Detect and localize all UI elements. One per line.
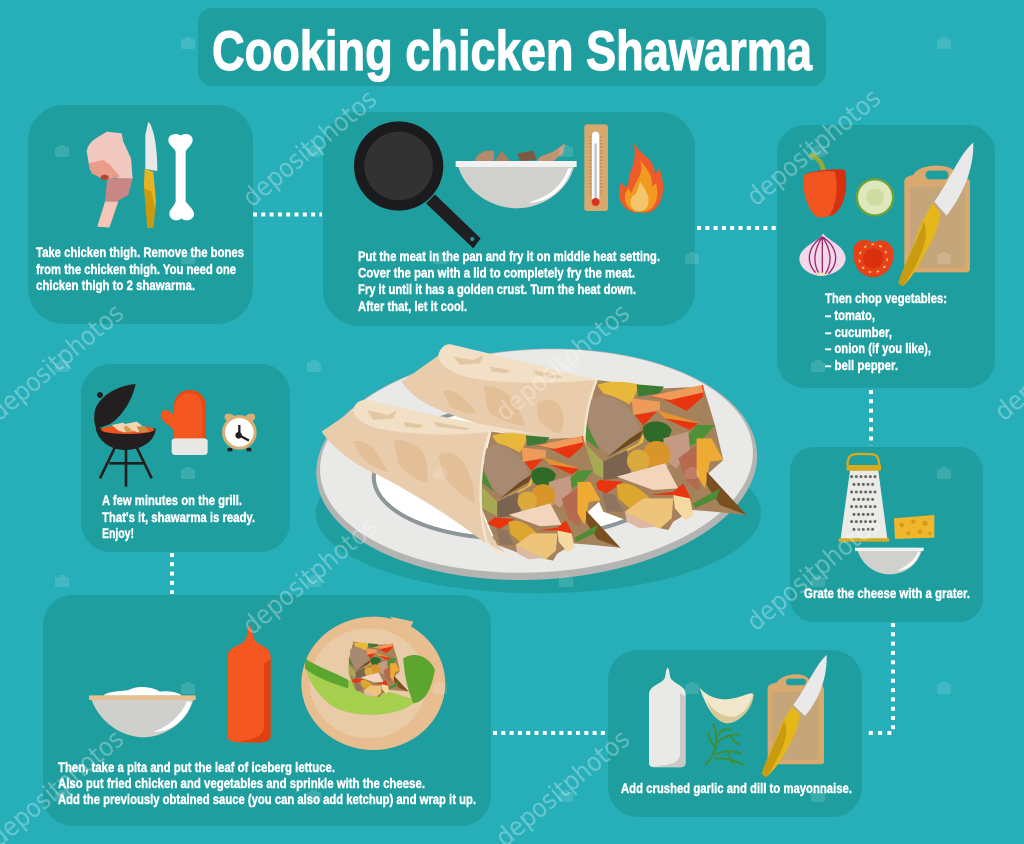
text: step 7: Enjoy! <box>102 525 134 541</box>
watermark: depositphotos: depositphotos <box>237 84 383 213</box>
icon: mayonnaise, garlic, dill, board and knife <box>649 655 827 777</box>
illustration: shawarma on a plate <box>310 338 763 593</box>
title panel <box>198 8 826 86</box>
icon: chicken thigh, knife and bone <box>87 122 194 228</box>
icon: bowl, ketchup bottle and open pita <box>89 617 445 750</box>
dotted connector: step 4 to step 5 <box>868 623 893 733</box>
wrap: back shawarma <box>402 344 747 530</box>
dotted connector: step 6 to step 7 <box>170 553 174 594</box>
watermark: depositphotos: depositphotos <box>490 298 636 427</box>
panel: step 7 grill <box>81 364 290 552</box>
text: step 1 <box>36 244 244 293</box>
plate shadow <box>316 433 761 593</box>
text: step 3 <box>825 290 947 373</box>
watermark: depositphotos: depositphotos <box>741 83 887 212</box>
panel: step 6 assemble <box>43 595 491 826</box>
icon: pepper, cucumber, onion, tomato, board and knife <box>799 143 973 286</box>
text: step 2: Cover the pan with a lid to completely fry the meat. <box>358 264 635 280</box>
text: step 1: chicken thigh to 2 shawarma. <box>36 277 195 293</box>
dotted connector: step 3 to step 4 <box>869 390 873 446</box>
panel: step 1 chicken <box>28 105 253 324</box>
panel: step 2 frying <box>323 112 695 326</box>
text: step 3: – tomato, <box>825 307 875 323</box>
text: step 2: Put the meat in the pan and fry it on middle heat setting. <box>358 248 660 264</box>
text: step 1: Take chicken thigh. Remove the bones <box>36 244 244 260</box>
text: step 7 <box>102 492 255 541</box>
text: step 3: – cucumber, <box>825 324 892 340</box>
text: step 7: A few minutes on the grill. <box>102 492 242 508</box>
plate <box>310 338 763 591</box>
title: Cooking chicken Shawarma <box>212 19 813 82</box>
dotted connector: step 5 to step 6 <box>493 731 608 735</box>
text: step 6: Also put fried chicken and vegetables and sprinkle with the cheese. <box>58 775 425 791</box>
watermark: depositphotos: depositphotos <box>741 508 887 637</box>
dotted connector: step 1 to step 2 <box>253 212 322 216</box>
panel: step 5 garlic sauce <box>608 650 862 817</box>
watermark: depositphotos: depositphotos <box>237 512 383 641</box>
text: step 2: After that, let it cool. <box>358 298 467 314</box>
text: step 6: Add the previously obtained sauce (you can also add ketchup) and wrap it up. <box>58 791 476 807</box>
text: step 2 <box>358 248 660 314</box>
icon: grill, oven mitt and alarm clock <box>94 384 257 487</box>
icon: frying pan, bowl, thermometer and flame <box>354 121 663 248</box>
text: step 7: That's it, shawarma is ready. <box>102 509 255 525</box>
panel: step 3 vegetables <box>777 125 995 388</box>
text: step 6: Then, take a pita and put the leaf of iceberg lettuce. <box>58 759 335 775</box>
text: step 3: – bell pepper. <box>825 357 898 373</box>
wrap: front shawarma <box>322 400 620 561</box>
text: step 5: Add crushed garlic and dill to mayonnaise. <box>621 780 852 796</box>
panel: step 4 cheese <box>790 447 983 622</box>
text: step 3: – onion (if you like), <box>825 340 931 356</box>
text: step 3: Then chop vegetables: <box>825 290 947 306</box>
icon: grater, cheese and bowl <box>839 454 934 574</box>
text: step 2: Fry it until it has a golden crust. Turn the heat down. <box>358 281 636 297</box>
dotted connector: step 2 to step 3 <box>697 226 776 230</box>
text: step 4: Grate the cheese with a grater. <box>804 585 970 601</box>
text: step 6 <box>58 759 476 807</box>
text: step 1: from the chicken thigh. You need one <box>36 261 236 277</box>
